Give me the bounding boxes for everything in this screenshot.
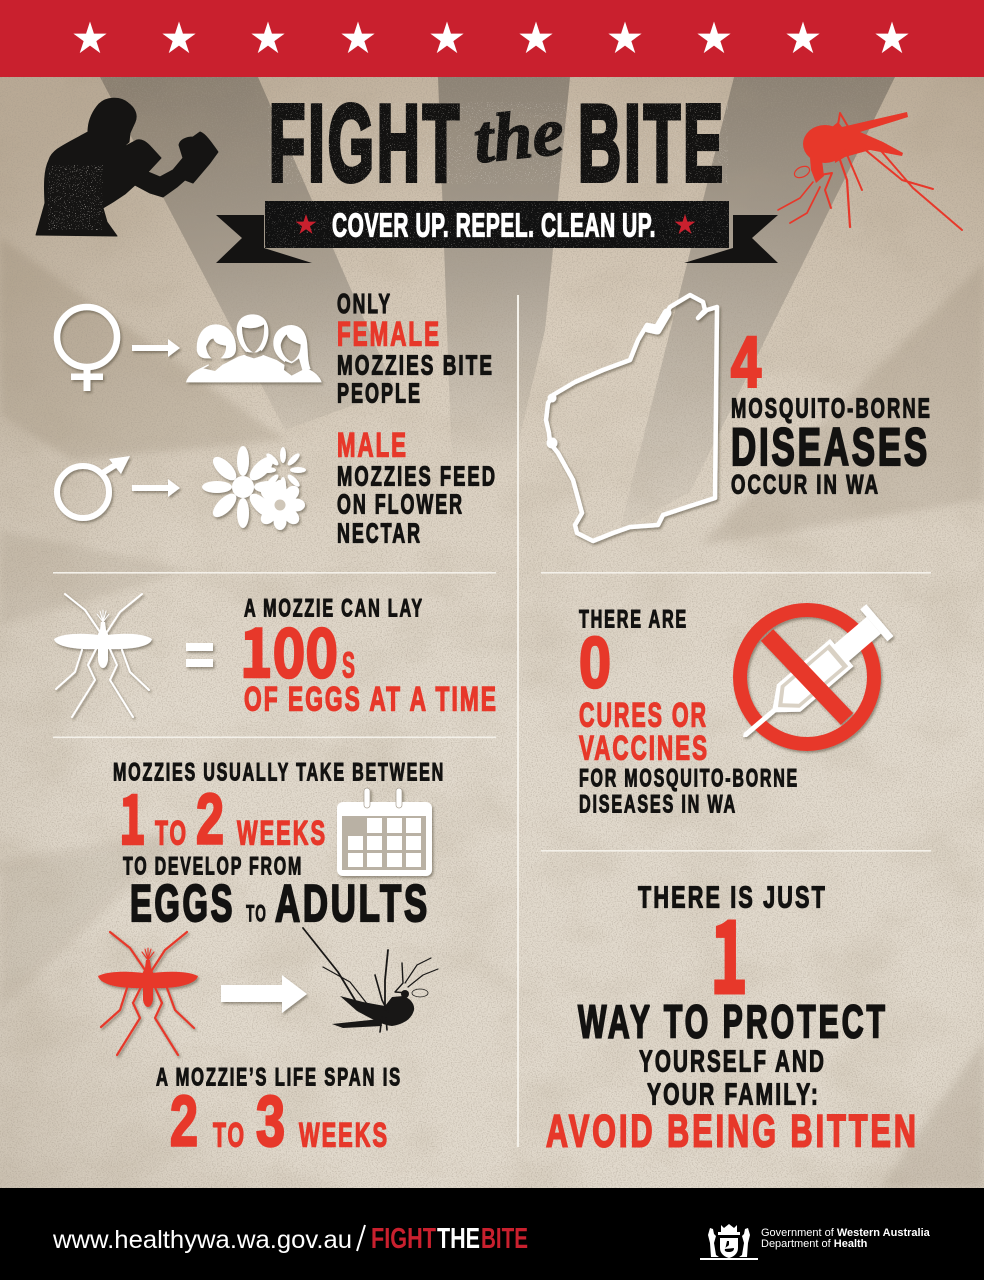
icon: flowers: [202, 446, 306, 530]
footer: department text: Department of Health: [761, 1238, 868, 1250]
text: mozzies usually take between 1 to 2 weeks: 2: [196, 780, 224, 860]
text: to develop from eggs to adults: EGGS: [130, 874, 235, 932]
icon: boxer silhouette: [36, 98, 218, 236]
footer: department text: Government of Western Australia: [761, 1227, 931, 1239]
footer: website link: FIGHT: [371, 1223, 436, 1255]
footer: website link: www.healthywa.wa.gov.au: [52, 1226, 352, 1254]
text: male mozzies feed on flower nectar: NECTAR: [337, 518, 422, 549]
text: only female mozzies bite people: PEOPLE: [337, 378, 422, 409]
text: 4 mosquito-borne diseases occur in WA: 4: [731, 324, 761, 402]
text: mozzies usually take between 1 to 2 weeks: 1: [119, 765, 146, 864]
banner: cover up, repel, clean up: COVER UP. REPEL. CLEAN UP.: [332, 206, 656, 244]
text: a mozzie's life span is 2 to 3 weeks: A MOZZIE’S LIFE SPAN IS: [156, 1064, 402, 1092]
text: a mozzie's life span is 2 to 3 weeks: TO: [213, 1117, 246, 1155]
icon: no vaccine syringe sign: [729, 604, 894, 753]
icon: calendar: [337, 788, 432, 876]
top red band with stars: [0, 0, 984, 77]
text: male mozzies feed on flower nectar: [337, 427, 497, 549]
text: there are 0 cures or vaccines: 0: [579, 624, 611, 704]
text: only female mozzies bite people: FEMALE: [337, 316, 441, 354]
icon: male symbol: [57, 456, 130, 518]
title: BITE: [578, 82, 726, 204]
text: male mozzies feed on flower nectar: MOZZIES FEED: [337, 461, 497, 492]
text: a mozzie can lay 100s of eggs at a time: A MOZZIE CAN LAY: [244, 595, 424, 623]
title: FIGHT: [269, 82, 462, 204]
icon: map of Western Australia: [546, 295, 717, 541]
footer: website link: [52, 1223, 528, 1255]
text: only female mozzies bite people: [337, 288, 494, 409]
icon: three people: [186, 314, 322, 382]
text: there are 0 cures or vaccines: DISEASES IN WA: [579, 791, 737, 819]
section dividers: [53, 295, 931, 1147]
text: a mozzie's life span is 2 to 3 weeks: [156, 1064, 402, 1162]
footer: WA government crest: [700, 1224, 758, 1260]
title: the: [470, 93, 567, 178]
text: male mozzies feed on flower nectar: MALE: [337, 427, 408, 465]
text: there is just 1 way to protect yourself and your family, avoid being bitten: 1: [710, 877, 748, 1022]
icon: female symbol: [57, 307, 117, 391]
text: only female mozzies bite people: MOZZIES BITE: [337, 350, 494, 381]
text: mozzies usually take between 1 to 2 weeks: TO: [155, 815, 188, 853]
text: to develop from eggs to adults: TO DEVELOP FROM: [123, 853, 303, 881]
text: to develop from eggs to adults: ADULTS: [275, 874, 430, 932]
text: to develop from eggs to adults: [123, 853, 430, 932]
arrow: male to flowers: [132, 479, 180, 497]
footer: website link: THE: [437, 1223, 480, 1255]
icon: dead black mosquito: [303, 928, 438, 1032]
text: a mozzie's life span is 2 to 3 weeks: 2: [170, 1082, 198, 1162]
text: there is just 1 way to protect yourself and your family, avoid being bitten: YOUR FAMILY:: [647, 1076, 820, 1112]
text: mozzies usually take between 1 to 2 weeks: WEEKS: [237, 815, 327, 853]
text: mozzies usually take between 1 to 2 weeks: MOZZIES USUALLY TAKE BETWEEN: [113, 759, 445, 787]
banner: cover up, repel, clean up: [216, 201, 778, 263]
text: there are 0 cures or vaccines: [579, 606, 799, 819]
arrow: female to people: [132, 339, 180, 357]
text: a mozzie's life span is 2 to 3 weeks: WEEKS: [299, 1117, 389, 1155]
text: a mozzie can lay 100s of eggs at a time: OF EGGS AT A TIME: [244, 681, 498, 719]
text: a mozzie can lay 100s of eggs at a time: 100: [240, 600, 338, 697]
text: there is just 1 way to protect yourself and your family, avoid being bitten: YOURSELF AND: [639, 1044, 826, 1078]
text: a mozzie can lay 100s of eggs at a time: [240, 595, 498, 719]
text: there are 0 cures or vaccines: VACCINES: [579, 730, 709, 768]
icon: red mosquito: [98, 932, 198, 1055]
text: there are 0 cures or vaccines: THERE ARE: [579, 606, 688, 634]
text: 4 mosquito-borne diseases occur in WA: OCCUR IN WA: [731, 470, 880, 500]
icon: white mosquito: [54, 594, 152, 717]
footer: department text: [761, 1227, 931, 1250]
text: male mozzies feed on flower nectar: ON FLOWER: [337, 489, 464, 520]
text: only female mozzies bite people: ONLY: [337, 288, 392, 319]
text: there are 0 cures or vaccines: FOR MOSQUITO-BORNE: [579, 765, 799, 793]
text: 4 mosquito-borne diseases occur in WA: [731, 324, 932, 500]
text: there are 0 cures or vaccines: CURES OR: [579, 697, 708, 735]
text: there is just 1 way to protect yourself and your family, avoid being bitten: [546, 877, 919, 1156]
text: a mozzie can lay 100s of eggs at a time: S: [342, 644, 355, 686]
text: a mozzie's life span is 2 to 3 weeks: 3: [256, 1082, 285, 1162]
icon: red mosquito top right: [778, 112, 962, 230]
arrow: white lifecycle arrow: [221, 975, 307, 1013]
text: there is just 1 way to protect yourself and your family, avoid being bitten: THERE IS JUST: [638, 880, 827, 914]
text: to develop from eggs to adults: TO: [246, 901, 267, 928]
footer: website link: BITE: [481, 1223, 528, 1255]
equals sign: [186, 643, 213, 667]
text: mozzies usually take between 1 to 2 weeks: [113, 759, 445, 864]
footer bar: [0, 1188, 984, 1280]
